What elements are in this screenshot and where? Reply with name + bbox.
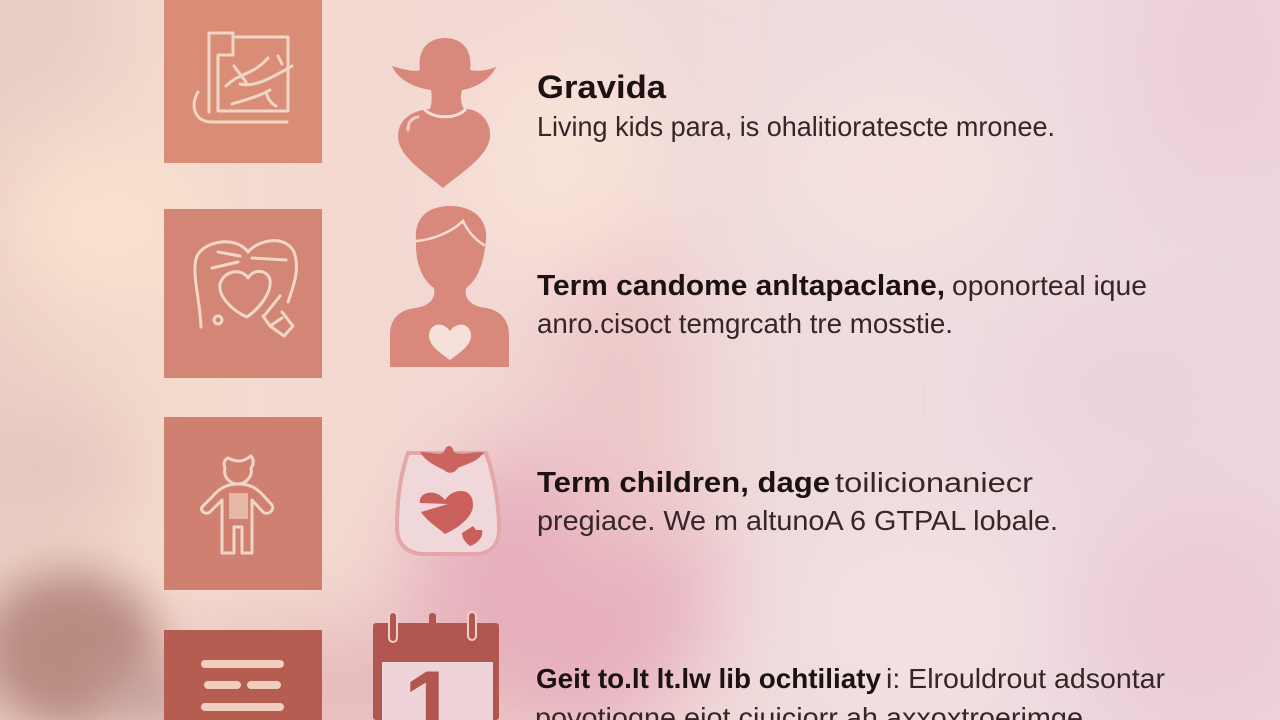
row 2: square heart icon bbox=[164, 209, 322, 378]
row 3: bag with hearts icon bbox=[397, 446, 499, 554]
row 4: square lines icon bbox=[164, 630, 322, 720]
text: row 1 description: Living kids para, is ohalitioratescte mronee. bbox=[537, 111, 1055, 142]
heading: row 4 text: i: Elrouldrout adsontar bbox=[886, 663, 1165, 694]
text: row 2 description: anro.cisoct temgrcath tre mosstie. bbox=[537, 308, 953, 339]
row 4: calendar icon bbox=[373, 612, 499, 720]
heading: row 3 text: Term children, dage bbox=[537, 467, 830, 499]
heading: row 2 text bbox=[537, 270, 1147, 302]
row 3: square child icon bbox=[164, 417, 322, 590]
heading: row 2 text: oponorteal ique bbox=[952, 270, 1147, 301]
row 1: person with heart icon bbox=[392, 38, 496, 188]
row 1: square map icon bbox=[164, 0, 322, 163]
heading: Gravida: Gravida bbox=[537, 69, 666, 105]
heading: row 3 text bbox=[537, 467, 1033, 499]
row 2: bust with heart icon bbox=[390, 206, 509, 367]
heading: row 3 text: toilicionaniecr bbox=[835, 467, 1033, 498]
heading: row 4 text: Geit to.lt lt.lw lib ochtiliaty bbox=[536, 663, 881, 694]
text: row 3 description: pregiace. We m altunoA 6 GTPAL lobale. bbox=[537, 505, 1058, 536]
heading: row 2 text: Term candome anltapaclane, bbox=[537, 270, 945, 302]
heading: row 4 text bbox=[536, 663, 1165, 694]
